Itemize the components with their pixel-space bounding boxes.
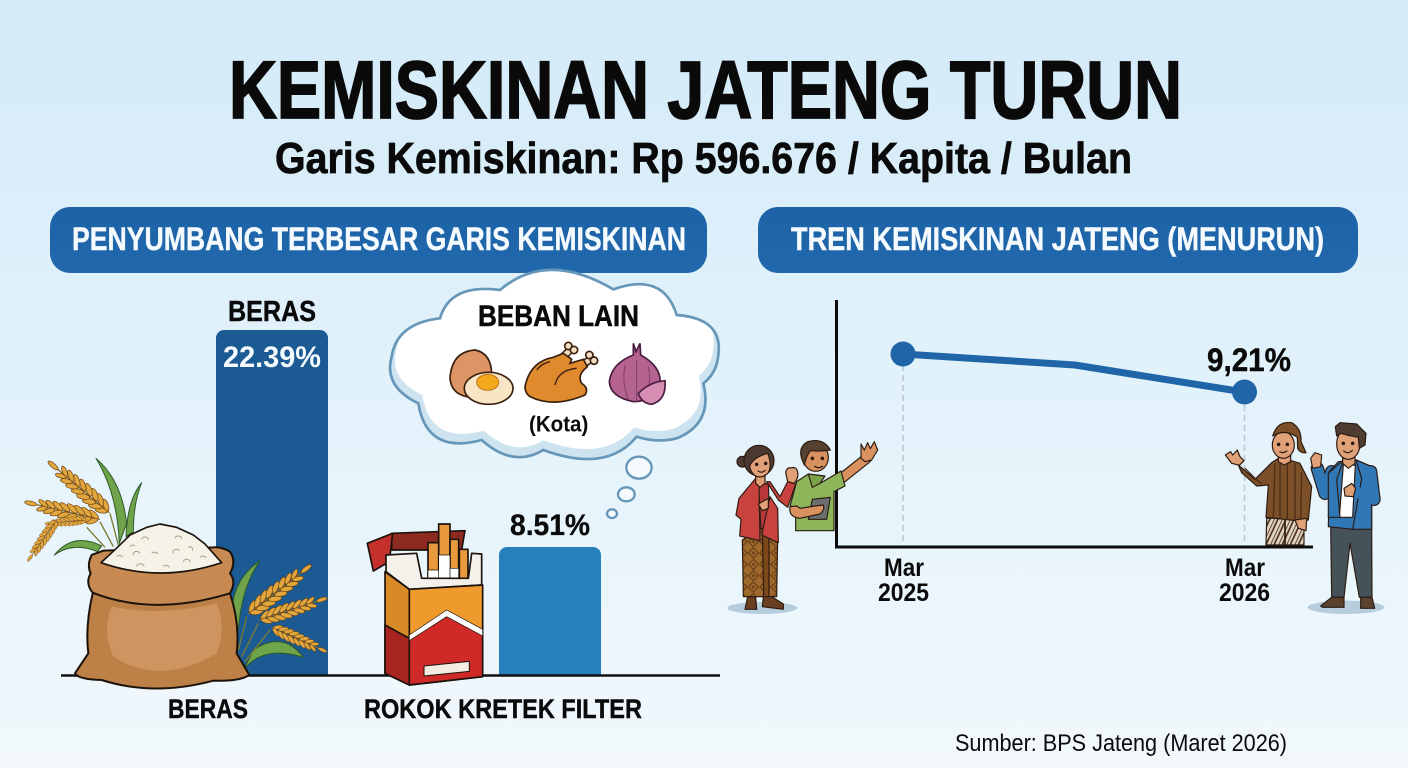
cigarettes (428, 524, 468, 581)
heading: beban lain: BEBAN LAIN (478, 300, 639, 333)
label: mar 2025 (878, 554, 929, 607)
sack body (75, 593, 249, 689)
axes (836, 300, 1313, 547)
value: 9,21%: 9,21% (1207, 342, 1291, 378)
rice (101, 524, 222, 573)
title: KEMISKINAN JATENG TURUN (229, 45, 1182, 136)
stalks (87, 513, 270, 662)
woman in red kebaya (727, 445, 798, 614)
icon: chicken (525, 342, 598, 402)
bar: rokok kretek filter (499, 547, 601, 675)
axis (61, 674, 720, 677)
source note: Sumber: BPS Jateng (Maret 2026) (955, 730, 1287, 757)
value: 8.51%: 8.51% (510, 509, 590, 542)
label: rokok kretek filter: ROKOK KRETEK FILTER (364, 694, 642, 724)
open lid (392, 531, 465, 550)
panel heading: tren kemiskinan: TREN KEMISKINAN JATENG (MENURUN) (791, 221, 1324, 257)
man in green shirt (790, 441, 878, 531)
leaves (54, 458, 303, 669)
pack front (409, 585, 483, 685)
panel heading: tren kemiskinan (758, 207, 1358, 273)
label: mar 2026 (1219, 554, 1270, 607)
pack side (385, 572, 409, 685)
wheat heads (23, 454, 330, 659)
inner collar (386, 553, 482, 589)
line chart: tren kemiskinan (836, 300, 1313, 607)
point: mar 2025 (890, 342, 916, 366)
panel heading: penyumbang terbesar: PENYUMBANG TERBESAR GARIS KEMISKINAN (72, 221, 686, 257)
label: mar 2025: Mar (884, 554, 924, 582)
label: mar 2026: Mar (1225, 554, 1265, 582)
man in blue jacket (1308, 423, 1384, 614)
bubbles (607, 457, 652, 518)
label: beras: BERAS (168, 694, 248, 724)
icon: egg (450, 350, 513, 404)
man in batik shirt (1225, 422, 1312, 545)
bar: beras (216, 330, 328, 675)
value: 22.39%: 22.39% (223, 341, 321, 374)
subtitle: Garis Kemiskinan: Rp 596.676 / Kapita / Bulan (275, 134, 1132, 183)
trend line (903, 354, 1244, 392)
icon: rice sack with wheat (23, 454, 330, 689)
label: mar 2026: 2026 (1219, 579, 1270, 607)
sack rim (88, 547, 233, 605)
bar chart: penyumbang garis kemiskinan (61, 296, 720, 724)
panel heading: penyumbang terbesar (50, 207, 707, 273)
label: beras atas: BERAS (228, 296, 316, 328)
icon: cigarette pack (367, 524, 483, 685)
label: kota: (Kota) (529, 412, 588, 437)
point: mar 2026 (1232, 380, 1257, 404)
illustration: woman and man waving (727, 441, 878, 614)
chevron (409, 616, 483, 685)
icon: shallot (609, 343, 665, 404)
label: mar 2025: 2025 (878, 579, 929, 607)
guide lines (903, 365, 1244, 545)
thought cloud: beban lain (390, 266, 719, 518)
illustration: two men presenting (1225, 422, 1384, 614)
cloud (390, 266, 719, 459)
